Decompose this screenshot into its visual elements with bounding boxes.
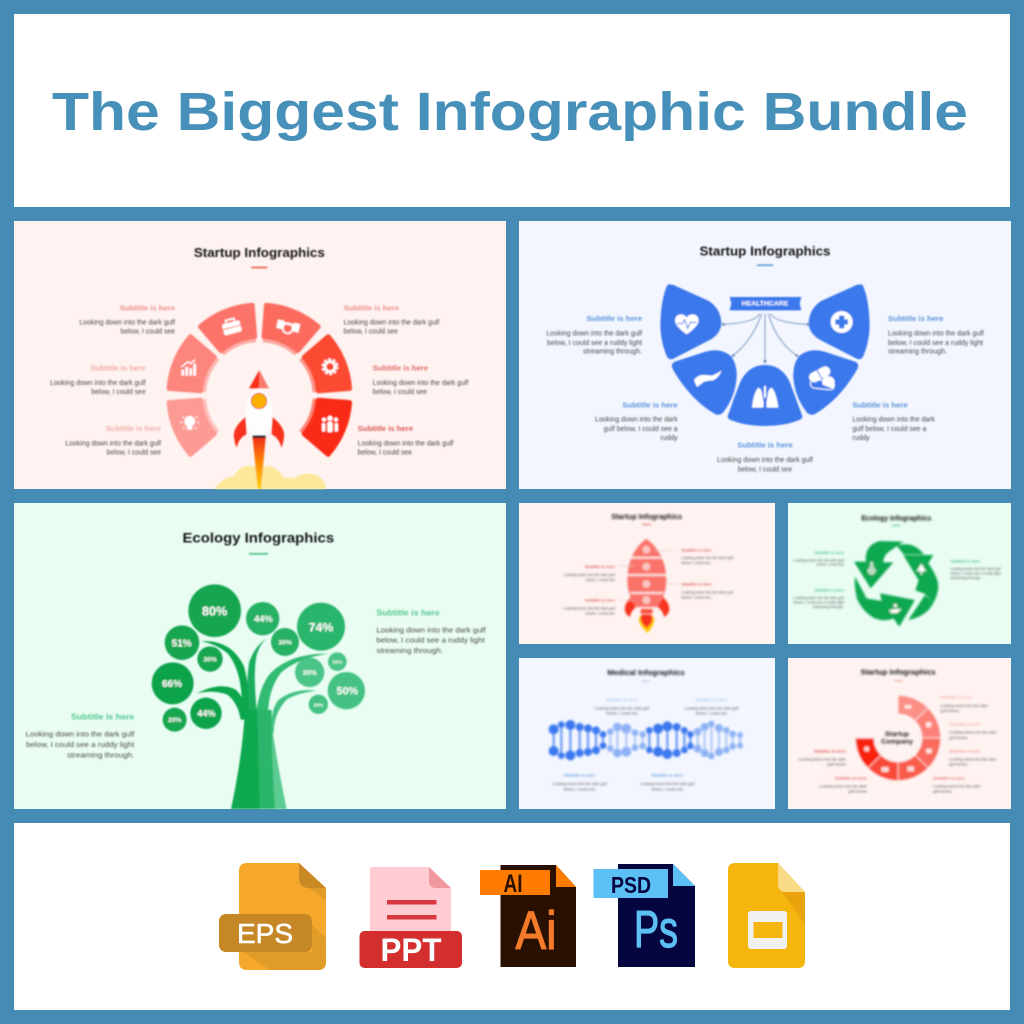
text: bottom left [65, 424, 161, 456]
text: left: Subtitle is here [71, 712, 135, 722]
text: bottom right: below, I could see [651, 787, 683, 791]
icon: EPS file: EPS [237, 918, 293, 949]
text: upper left [546, 314, 642, 356]
text: top right: Subtitle is here [681, 547, 712, 552]
icon: lungs [752, 386, 778, 408]
text: lower left [793, 589, 844, 609]
text: bottom right: below, I could see [358, 449, 412, 456]
text: right 3 [949, 749, 997, 767]
healthcare segments [660, 284, 870, 426]
text: top right: Subtitle is here [695, 697, 728, 702]
text: right 4 [933, 776, 981, 794]
panel: ecology tree [14, 503, 506, 809]
text: bottom: Subtitle is here [737, 440, 793, 449]
text: bottom left: below, I could see [107, 449, 161, 456]
percentage bubbles: 44% [197, 708, 215, 718]
text: bottom [717, 440, 813, 473]
text: lower right: below, I could see [681, 595, 711, 599]
text: top left [79, 303, 175, 336]
heading: Startup Infographics [194, 246, 325, 260]
text: lower left: Subtitle is here [622, 400, 678, 409]
panel: startup donut [788, 658, 1011, 809]
icon: briefcase [221, 317, 242, 336]
text: top right [681, 547, 734, 565]
rocket [625, 539, 669, 633]
text: bottom left: Subtitle is here [564, 773, 596, 778]
text: lower left: Subtitle is here [815, 589, 844, 593]
text: upper left [563, 564, 616, 582]
text: right [376, 608, 487, 655]
text: bottom right: Looking down into the dark gulf [358, 440, 453, 447]
icon: team [322, 416, 338, 432]
text: lower right: Subtitle is here [852, 400, 908, 409]
text: lower right: Looking down into the dark [852, 417, 935, 424]
text: left lower: Subtitle is here [835, 776, 867, 780]
icon: caring hand [694, 370, 722, 387]
percentage bubbles: 74% [309, 620, 333, 634]
text: top left: Looking down into the dark gulf [595, 706, 650, 710]
donut centre label: Startup [885, 731, 909, 738]
rocket [234, 370, 284, 489]
text: lower left [563, 598, 616, 616]
icon: growth chart [181, 360, 196, 376]
text: right 4: gulf below [933, 790, 952, 794]
text: right: below, I could see a ruddy light [951, 571, 1001, 575]
icon: Adobe Illustrator file: AI [504, 870, 522, 898]
icon: Adobe Illustrator file [480, 865, 576, 967]
percentage bubbles: 66% [162, 679, 182, 690]
recycling arrows [854, 541, 938, 627]
icon: Adobe Photoshop file: PSD [611, 872, 651, 898]
text: right 2: Subtitle is here [949, 722, 981, 726]
text: right: below, I could see a ruddy light [376, 636, 486, 645]
percentage bubbles [152, 584, 365, 732]
heading: Medical Infographics [607, 668, 685, 677]
text: right 1 [940, 695, 988, 713]
text: top right: Looking down into the dark gulf [344, 320, 439, 327]
text: upper left: below, I could see a ruddy light [547, 340, 642, 347]
heading: Startup Infographics [611, 514, 682, 521]
panel: rocket stages [519, 503, 775, 644]
icon: Adobe Photoshop file [594, 864, 695, 967]
text: right 1: gulf below [940, 709, 959, 713]
DNA helix [549, 720, 743, 760]
text: left: Looking down into the dark gulf [26, 730, 135, 739]
text: left: below, I could see a ruddy light [26, 740, 135, 749]
percentage bubbles: 30% [303, 670, 317, 677]
text: upper left: below, I could see [817, 563, 844, 567]
text: lower left: below, I could see [586, 612, 615, 616]
percentage bubbles: 30% [278, 639, 292, 646]
text: lower right: Looking down into the dark gulf [681, 590, 734, 594]
text: left upper: gulf below [827, 763, 846, 767]
icon: gear [323, 359, 337, 374]
smoke cloud [214, 466, 326, 489]
icon: globe plant [868, 562, 875, 574]
panel: startup fan with rocket [14, 221, 506, 489]
text: lower left: streaming through. [813, 605, 844, 609]
text: top left: Subtitle is here [120, 303, 175, 312]
text: lower left [595, 400, 678, 442]
text: lower right: ruddy [852, 435, 870, 442]
text: top left [595, 697, 650, 715]
text: lower right: Subtitle is here [681, 582, 712, 587]
text: upper left: Looking down into the dark gulf [546, 330, 642, 337]
panel: healthcare [519, 221, 1011, 489]
icon: PPT file: PPT [380, 932, 442, 968]
heading: Startup Infographics [860, 668, 935, 677]
icon: Adobe Illustrator file: Ai [516, 901, 556, 961]
text: top left: below, I could see [121, 329, 175, 336]
text: middle left [50, 364, 146, 396]
text: middle left: Looking down into the dark gulf [50, 380, 146, 387]
text: top right [684, 697, 740, 715]
text: bottom right: Looking down into the dark gulf [640, 782, 696, 786]
text: right 4: Looking down into the dark [933, 785, 981, 789]
text: middle left: below, I could see [91, 389, 146, 396]
text: upper right [888, 314, 984, 356]
text: upper left: Looking down into the dark gulf [563, 573, 616, 577]
text: upper left: Subtitle is here [815, 551, 844, 555]
icon: Adobe Photoshop file: Ps [634, 901, 678, 959]
text: lower left: ruddy [660, 435, 678, 442]
text: right 2 [949, 722, 997, 740]
text: bottom: below, I could see [738, 466, 792, 473]
text: lower left: Looking down into the dark gulf [563, 607, 616, 611]
text: top right: below, I could see [681, 561, 711, 565]
text: top right: Looking down into the dark gulf [681, 556, 734, 560]
banner: healthcare [730, 297, 801, 310]
text: upper left: Subtitle is here [585, 564, 616, 569]
text: middle right: Subtitle is here [373, 364, 428, 373]
connector lines with arrows [721, 314, 810, 364]
icon: tree [917, 564, 926, 575]
heading: Startup Infographics [699, 244, 830, 258]
text: bottom right: Subtitle is here [651, 773, 684, 778]
text: left lower [819, 776, 867, 794]
panel: file formats [14, 823, 1010, 1010]
percentage bubbles: 20% [168, 717, 181, 724]
text: right 4: Subtitle is here [933, 776, 965, 780]
percentage bubbles: 80% [202, 604, 227, 618]
text: upper right: below, I could see a ruddy light [888, 340, 983, 347]
icon: medical cross [831, 311, 853, 333]
tree trunk and branches [197, 638, 329, 809]
text: right 1: Looking down into the dark [940, 704, 988, 708]
text: bottom left: Subtitle is here [106, 424, 161, 433]
percentage bubbles: 50% [337, 686, 359, 698]
text: right 2: Looking down into the dark [949, 731, 997, 735]
text: left lower: gulf below [848, 790, 867, 794]
donut centre label [881, 731, 913, 746]
text: middle right [373, 364, 468, 396]
text: left upper: Subtitle is here [814, 749, 846, 753]
panel: recycling [788, 503, 1011, 644]
text: middle left: Subtitle is here [90, 364, 146, 373]
panel: DNA medical [519, 658, 775, 809]
text: upper left: below, I could see [586, 578, 615, 582]
banner: healthcare: HEALTHCARE [742, 300, 789, 307]
donut segments [846, 695, 949, 789]
text: bottom left: Looking down into the dark gulf [552, 782, 608, 786]
icon: handshake [276, 319, 300, 336]
text: left lower: Looking down into the dark [819, 785, 867, 789]
text: lower left: below, I could see a ruddy light [793, 600, 844, 604]
text: right: Subtitle is here [376, 608, 440, 618]
text: bottom: Looking down into the dark gulf [717, 457, 813, 464]
heading: Ecology Infographics [861, 515, 931, 522]
text: top right: Subtitle is here [344, 303, 399, 312]
text: lower left: gulf below, I could see a [604, 426, 678, 433]
text: top right: below, I could see [695, 711, 727, 715]
text: left upper: Looking down into the dark [798, 758, 846, 762]
icon: capsules [807, 365, 835, 390]
text: right: Looking down into the dark gulf [376, 625, 487, 634]
text: right 3: Looking down into the dark [949, 758, 997, 762]
text: right 3: Subtitle is here [949, 749, 981, 753]
text: lower right: gulf below, I could see a [852, 426, 926, 433]
title: The Biggest Infographic Bundle [52, 82, 968, 142]
text: bottom left [552, 773, 608, 791]
donut centre label: Company [881, 739, 913, 746]
text: lower right [852, 400, 935, 442]
text: top left: Subtitle is here [606, 697, 639, 702]
text: lower left: Subtitle is here [585, 598, 616, 603]
text: bottom right [640, 773, 696, 791]
percentage bubbles: 10% [332, 660, 343, 666]
text: upper left: streaming through. [583, 349, 642, 356]
text: right: Looking down into the dark gulf [951, 567, 1001, 571]
percentage bubbles: 44% [254, 614, 273, 624]
heading: Ecology Infographics [182, 529, 334, 545]
icon: light bulb [180, 416, 199, 430]
text: left [26, 712, 135, 759]
text: right [951, 560, 1001, 580]
icon: hand with plant [889, 604, 901, 613]
text: top left: below, I could see [606, 711, 638, 715]
text: top right: below, I could see [344, 329, 398, 336]
text: left upper [798, 749, 846, 767]
text: top right: Looking down into the dark gulf [684, 706, 740, 710]
percentage bubbles: 10% [313, 702, 324, 708]
text: right 3: gulf below [949, 763, 968, 767]
text: lower left: Looking down into the dark gulf [793, 596, 844, 600]
icon: heart [675, 314, 699, 334]
text: middle right: below, I could see [373, 389, 427, 396]
semicircular segments [154, 290, 365, 456]
text: upper right: Looking down into the dark gulf [888, 330, 984, 337]
text: bottom left: below, I could see [564, 787, 595, 791]
text: upper right: Subtitle is here [888, 314, 943, 323]
icon: EPS file [219, 863, 326, 970]
percentage bubbles: 51% [172, 639, 192, 650]
text: right 1: Subtitle is here [940, 695, 972, 699]
text: left: streaming through. [67, 750, 134, 759]
text: right: streaming through. [951, 576, 981, 580]
text: right 2: gulf below [949, 736, 968, 740]
text: bottom right [358, 424, 453, 456]
text: lower right [681, 582, 734, 599]
title panel [14, 14, 1010, 207]
text: middle right: Looking down into the dark gulf [373, 380, 468, 387]
text: upper right: streaming through. [888, 349, 947, 356]
icon: PPT file [360, 867, 462, 968]
text: upper left: Subtitle is here [587, 314, 642, 323]
text: upper left: Looking down into the dark gulf [793, 558, 844, 562]
icon: Google Slides file [728, 863, 805, 968]
text: top left: Looking down into the dark gulf [79, 320, 175, 327]
percentage bubbles: 30% [203, 656, 217, 663]
text: right: streaming through. [376, 646, 443, 655]
text: upper left [793, 551, 844, 567]
text: bottom left: Looking down into the dark gulf [65, 440, 161, 447]
donut icons [864, 705, 932, 772]
text: lower left: Looking down into the dark [595, 417, 678, 424]
text: bottom right: Subtitle is here [358, 424, 413, 433]
text: right: Subtitle is here [951, 560, 980, 564]
text: top right [344, 303, 439, 336]
